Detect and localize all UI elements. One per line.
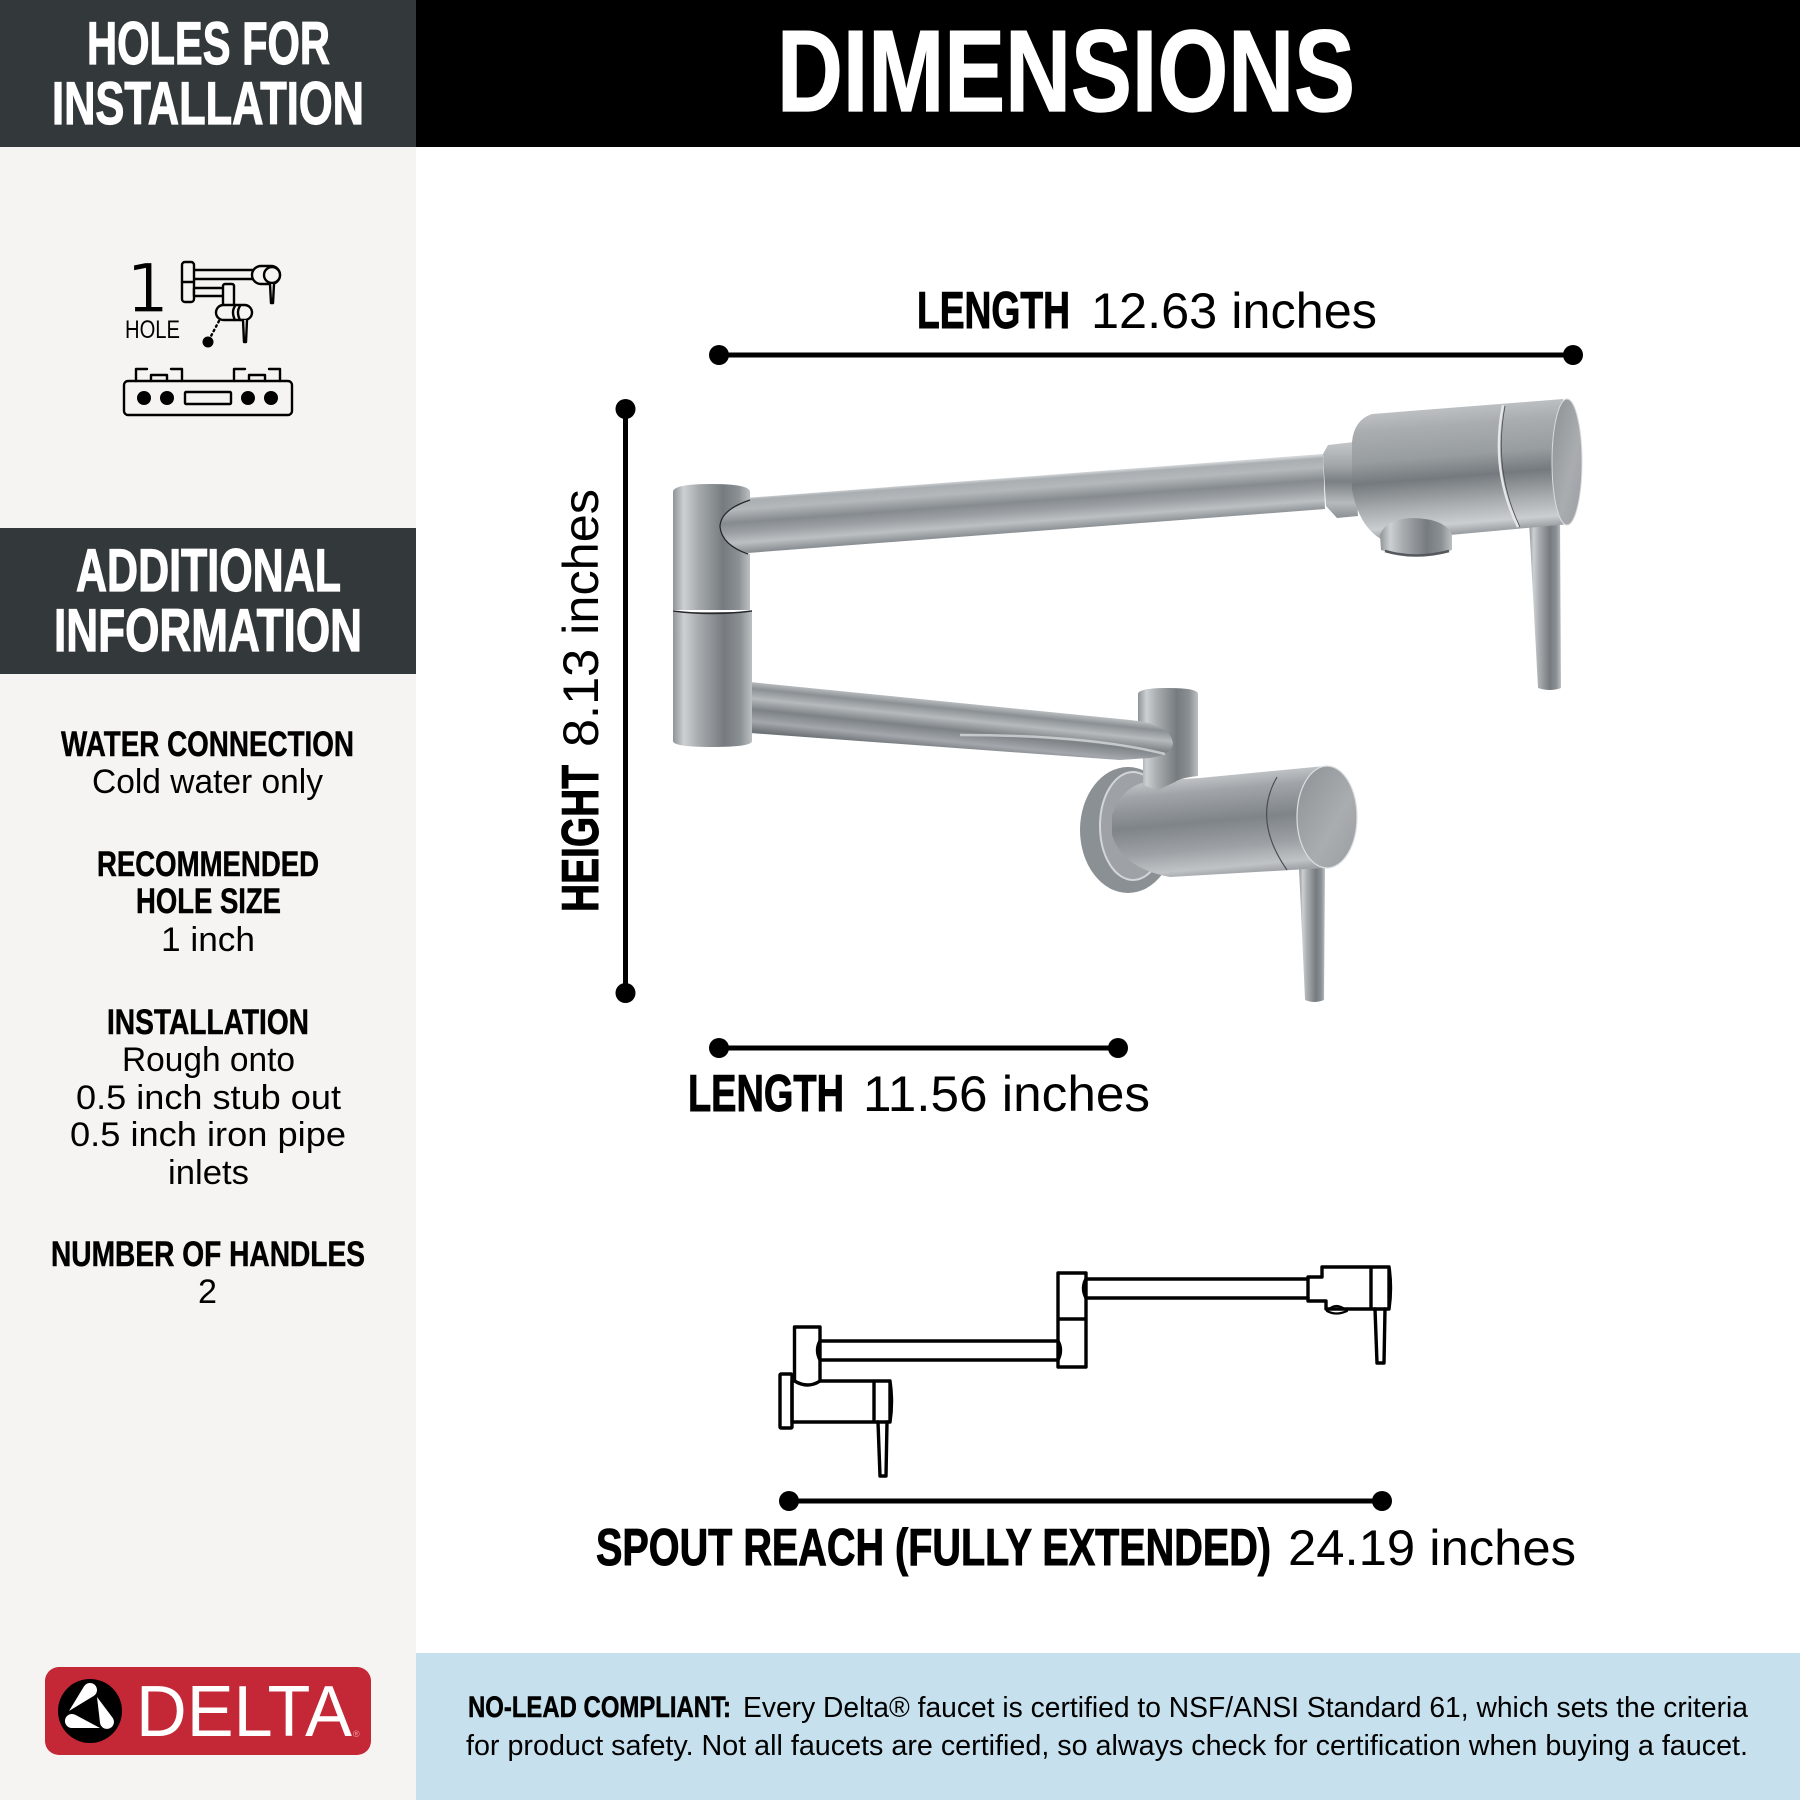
text block: water connection: Cold water only	[92, 763, 323, 801]
dimension: top length: 12.63 inches	[1091, 283, 1377, 339]
outline: wall body	[792, 1381, 892, 1422]
faucet: spout head	[1352, 399, 1582, 541]
outline: escutcheon	[780, 1374, 792, 1428]
faucet: top arm	[720, 454, 1325, 553]
dimension: height: 8.13 inches	[553, 489, 609, 747]
panel heading: additional information: ADDITIONAL	[76, 537, 341, 604]
dimension: top length: LENGTH	[917, 282, 1070, 340]
faucet: spout collar	[1323, 442, 1358, 518]
text block: number of handles	[51, 1235, 365, 1311]
icon label: 1 hole: 1	[126, 250, 169, 329]
icon: cooktop	[124, 369, 292, 415]
text block: installation	[70, 1003, 346, 1192]
outline: spout head	[1308, 1267, 1390, 1309]
text block: recommended hole size: 1 inch	[161, 921, 255, 959]
dimension: height	[552, 399, 636, 1003]
text block: installation: inlets	[168, 1154, 249, 1192]
dimension: spout reach	[596, 1491, 1576, 1577]
dimension: spout reach: 24.19 inches	[1288, 1520, 1576, 1576]
outline: spout handle	[1375, 1309, 1385, 1363]
text block: installation: 0.5 inch stub out	[76, 1079, 342, 1117]
panel heading: additional information	[0, 528, 416, 674]
header: dimensions band	[416, 0, 1800, 147]
callout: no-lead compliant	[416, 1653, 1800, 1800]
faucet: aerator	[1380, 518, 1452, 556]
outline: lower handle	[878, 1422, 887, 1476]
outline: spout arm	[1086, 1279, 1308, 1298]
text block: recommended hole size: RECOMMENDED	[97, 845, 319, 884]
panel heading: additional information: INFORMATION	[54, 597, 362, 664]
logo: delta	[45, 1667, 371, 1755]
text block: water connection: WATER CONNECTION	[61, 725, 354, 764]
faucet: lower arm	[750, 682, 1173, 760]
text block: installation: 0.5 inch iron pipe	[70, 1116, 346, 1154]
logo emblem	[58, 1679, 122, 1743]
faucet: spout handle	[1529, 518, 1561, 690]
dimension: lower length: LENGTH	[688, 1065, 844, 1123]
header: dimensions band: DIMENSIONS	[777, 6, 1355, 136]
icon: faucet outline	[182, 262, 280, 342]
text block: recommended hole size	[97, 845, 319, 959]
callout: no-lead compliant: NO-LEAD COMPLIANT:	[468, 1691, 731, 1724]
text block: installation: Rough onto	[122, 1041, 295, 1079]
logo: delta: DELTA	[136, 1672, 352, 1752]
text block: water connection	[61, 725, 354, 801]
faucet: lower pivot	[673, 611, 752, 747]
line drawing: fully extended faucet	[780, 1267, 1390, 1476]
icon: one hole pot filler over cooktop	[124, 250, 292, 415]
text block: number of handles: 2	[198, 1273, 217, 1311]
faucet: lower handle	[1299, 865, 1325, 1002]
text block: recommended hole size: HOLE SIZE	[136, 882, 281, 921]
dimension: top length	[709, 282, 1583, 365]
dimension: lower length: 11.56 inches	[863, 1066, 1150, 1122]
outline: aerator	[1327, 1306, 1347, 1314]
icon: hole dot	[202, 336, 214, 348]
callout: no-lead compliant: Every Delta® faucet is certified to NSF/ANSI Standard 61, which sets the criteria	[743, 1692, 1749, 1724]
faucet: wall escutcheon	[1080, 767, 1176, 893]
outline: left pivot	[794, 1327, 820, 1385]
dimension: spout reach: SPOUT REACH (FULLY EXTENDED)	[596, 1519, 1271, 1577]
faucet: wall body	[1112, 766, 1357, 877]
icon label: 1 hole	[125, 250, 180, 344]
icon label: 1 hole: HOLE	[125, 316, 180, 344]
panel heading: holes for installation	[0, 0, 416, 147]
faucet: vertical stub	[1138, 688, 1198, 790]
outline: middle arm	[820, 1341, 1058, 1360]
panel heading: holes for installation: INSTALLATION	[52, 70, 364, 137]
panel: left sidebar background	[0, 146, 416, 1800]
photo: pot filler faucet	[673, 399, 1582, 1002]
outline: centre pivot	[1058, 1273, 1086, 1367]
logo: delta: ®	[353, 1729, 360, 1739]
text block: installation: INSTALLATION	[107, 1003, 309, 1042]
dimension: height: HEIGHT	[552, 765, 610, 912]
dimension: lower length	[688, 1038, 1150, 1123]
text block: number of handles: NUMBER OF HANDLES	[51, 1235, 365, 1274]
panel heading: holes for installation: HOLES FOR	[87, 10, 330, 77]
callout: no-lead compliant: for product safety. Not all faucets are certified, so always check for certification when buying a faucet.	[466, 1730, 1748, 1762]
faucet: upper pivot	[673, 484, 750, 610]
